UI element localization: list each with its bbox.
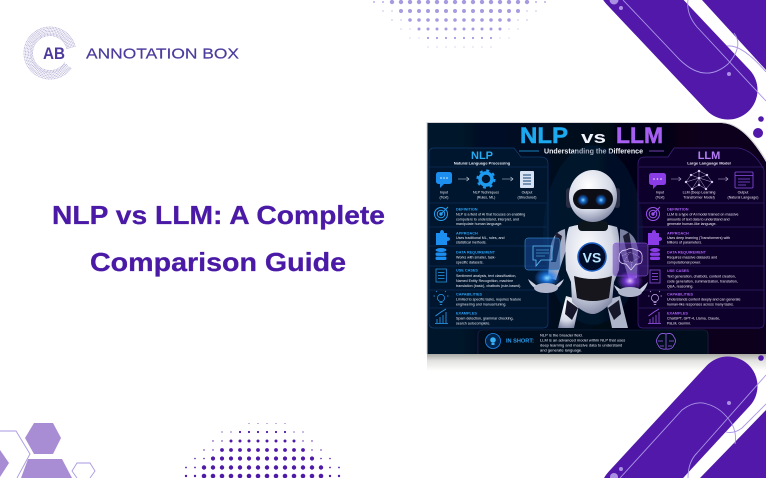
LLM panel heading xyxy=(688,152,730,166)
data requirement: DATA REQUIREMENT xyxy=(667,250,707,254)
NLP panel outline xyxy=(429,148,548,328)
flow labels xyxy=(440,190,536,200)
flow labels: NLP Techniques xyxy=(473,190,499,194)
icon: neural network xyxy=(685,170,713,190)
icon: brain xyxy=(656,333,676,349)
flow labels: LLM (Deep Learning xyxy=(683,190,715,194)
screenshot edge lines xyxy=(427,122,766,354)
icon: document xyxy=(650,270,660,283)
bottom dot pattern xyxy=(186,424,348,476)
LLM flow: input to output xyxy=(649,170,758,200)
capabilities: Understands context deeply and can generate xyxy=(667,298,741,302)
embedded infographic: NLP vs LLM xyxy=(427,123,766,362)
icon: puzzle xyxy=(436,230,450,245)
icon: light bulb badge xyxy=(486,334,500,348)
title: NLP vs LLM: A Complete xyxy=(52,200,385,230)
data requirement: DATA REQUIREMENT xyxy=(456,250,496,254)
icon: growth chart xyxy=(648,309,661,324)
capabilities: CAPABILITIES xyxy=(667,292,694,296)
use cases: Text generation, chatbots, content creation, xyxy=(667,274,736,278)
logo wordmark: ANNOTATION BOX xyxy=(86,46,239,62)
examples xyxy=(456,312,514,326)
use cases: USE CASES xyxy=(667,269,689,273)
infographic heading: LLM xyxy=(616,123,663,148)
bottom left hexagons xyxy=(0,423,95,478)
approach: Uses deep learning (Transformers) with xyxy=(667,236,730,240)
LLM panel outline xyxy=(638,148,764,328)
capabilities: CAPABILITIES xyxy=(456,292,483,296)
capabilities xyxy=(667,292,741,306)
approach: statistical methods. xyxy=(456,240,487,244)
right hand with purple glow xyxy=(614,271,648,297)
definition: manipulate human language. xyxy=(456,222,502,226)
approach xyxy=(456,232,504,244)
icon: document xyxy=(436,269,446,282)
VS badge xyxy=(578,243,606,271)
robot neck xyxy=(578,221,608,231)
screenshot drop shadow xyxy=(427,354,766,371)
icon: chat xyxy=(436,172,452,188)
robot eyes xyxy=(577,194,607,206)
icon: light bulb xyxy=(648,291,662,304)
infographic background xyxy=(427,123,766,354)
icon: database xyxy=(650,248,660,260)
title xyxy=(52,200,385,277)
NLP row text xyxy=(456,208,525,326)
flow labels: (Text) xyxy=(656,196,664,200)
icon: chat xyxy=(649,173,666,189)
data requirement xyxy=(456,250,496,264)
in short text: LLM is an advanced model within NLP that uses xyxy=(540,338,625,342)
in short bar xyxy=(478,330,708,362)
bottom right decorative bands xyxy=(610,355,766,478)
arrow xyxy=(671,177,681,181)
logo monogram: AB xyxy=(43,44,65,63)
examples: ChatGPT, GPT-4, Llama, Claude, xyxy=(667,316,720,320)
in short label: IN SHORT: xyxy=(506,338,534,344)
holographic chat panel xyxy=(525,238,560,270)
flow labels: (Natural Language) xyxy=(728,196,758,200)
approach: APPROACH xyxy=(667,232,689,236)
robot head xyxy=(566,170,620,222)
definition: generate human-like language. xyxy=(667,222,717,226)
definition: NLP is a field of AI that focuses on enabling xyxy=(456,212,525,216)
definition xyxy=(456,208,525,226)
LLM row icons xyxy=(646,207,662,324)
NLP flow: input to output xyxy=(436,170,536,200)
arrow xyxy=(718,177,728,181)
data requirement: specific datasets. xyxy=(456,260,484,264)
NLP panel heading: NLP xyxy=(471,150,493,162)
examples: PaLM, Gemini. xyxy=(667,322,691,326)
icon: target xyxy=(434,207,448,220)
definition: DEFINITION xyxy=(456,208,478,212)
examples: search autocomplete. xyxy=(456,322,490,326)
flow labels: Input xyxy=(656,190,664,194)
LLM dividers xyxy=(639,167,764,308)
use cases: USE CASES xyxy=(456,268,478,272)
NLP row icons xyxy=(434,207,450,324)
LLM panel heading: LLM xyxy=(698,150,720,162)
icon: list xyxy=(520,171,534,188)
flow labels: Output xyxy=(738,190,748,194)
flow labels: (Text) xyxy=(440,196,448,200)
use cases xyxy=(667,269,738,288)
use cases: code generation, summarization, translation, xyxy=(667,280,738,284)
LLM panel heading: Large Language Model xyxy=(687,160,731,166)
use cases: Named Entity Recognition, machine xyxy=(456,279,513,283)
infographic heading: NLP xyxy=(520,123,568,148)
flow labels: Transformer Model) xyxy=(683,196,715,200)
arrow xyxy=(458,177,469,181)
VS badge: VS xyxy=(583,250,601,266)
robot visor xyxy=(573,189,613,209)
icon: growth chart xyxy=(435,309,448,324)
approach: billions of parameters. xyxy=(667,240,702,244)
flow labels: Output xyxy=(522,190,532,194)
flow labels: (Rules, ML) xyxy=(477,196,495,200)
in short text: and generate language. xyxy=(540,348,582,352)
approach xyxy=(667,232,730,244)
data requirement: Requires massive datasets and xyxy=(667,256,717,260)
use cases xyxy=(456,268,521,288)
approach: APPROACH xyxy=(456,232,478,236)
top right decorative bands xyxy=(610,0,766,122)
panel: LLM xyxy=(638,148,764,328)
robot midriff xyxy=(574,276,612,301)
use cases: translation (basic), chatbots (rule-based). xyxy=(456,284,521,288)
flow labels xyxy=(656,190,758,200)
NLP panel heading xyxy=(454,152,510,166)
left hand with blue glow xyxy=(528,268,564,293)
use cases: Q&A, reasoning. xyxy=(667,284,693,288)
LLM row text xyxy=(667,208,741,326)
icon: database xyxy=(436,248,446,260)
robot legs xyxy=(558,296,628,328)
robot glow xyxy=(543,145,643,325)
robot arms xyxy=(548,229,638,280)
data requirement: computational power. xyxy=(667,260,701,264)
definition: LLM is a type of AI model trained on massive xyxy=(667,212,739,216)
logo: Annotation Box xyxy=(24,27,239,79)
purple accent dot xyxy=(753,128,763,138)
data requirement xyxy=(667,250,717,264)
title: Comparison Guide xyxy=(90,247,346,277)
use cases: Sentiment analysis, text classification, xyxy=(456,274,516,278)
NLP dividers xyxy=(429,167,547,308)
capabilities: human-like responses across many tasks. xyxy=(667,302,734,306)
infographic heading: Understanding the Difference xyxy=(544,146,643,156)
flow labels: (Structured) xyxy=(518,196,536,200)
definition: amounts of text data to understand and xyxy=(667,218,730,222)
robot torso xyxy=(565,224,620,314)
infographic heading xyxy=(519,127,664,155)
data requirement: Works with smaller, task- xyxy=(456,256,496,260)
approach: Uses traditional ML, rules, and xyxy=(456,236,505,240)
icon: output window xyxy=(735,172,753,188)
icon: light bulb xyxy=(434,291,448,304)
definition: computers to understand, interpret, and xyxy=(456,218,519,222)
definition: DEFINITION xyxy=(667,208,689,212)
robot illustration xyxy=(525,145,648,328)
icon: target xyxy=(646,207,660,220)
definition xyxy=(667,208,739,226)
examples: EXAMPLES xyxy=(456,312,477,316)
top dot pattern xyxy=(374,2,546,47)
arrow xyxy=(502,177,513,181)
infographic heading: vs xyxy=(581,128,606,147)
icon: gear xyxy=(477,170,495,188)
flow labels: Input xyxy=(440,190,448,194)
capabilities: engineering and manual tuning. xyxy=(456,302,506,306)
capabilities: Limited to specific tasks, requires feature xyxy=(456,298,521,302)
in short text xyxy=(540,332,625,352)
holographic brain panel xyxy=(613,243,648,276)
logo ring xyxy=(24,27,75,79)
icon: puzzle xyxy=(648,230,662,245)
in short text: deep learning and massive data to understand xyxy=(540,342,622,348)
panel: NLP xyxy=(429,148,548,328)
bar background xyxy=(478,330,708,362)
in short text: NLP is the broader field. xyxy=(540,332,583,338)
examples: EXAMPLES xyxy=(667,312,688,316)
examples: Spam detection, grammar checking, xyxy=(456,316,514,320)
capabilities xyxy=(456,292,521,306)
examples xyxy=(667,312,720,326)
NLP panel heading: Natural Language Processing xyxy=(454,160,511,166)
